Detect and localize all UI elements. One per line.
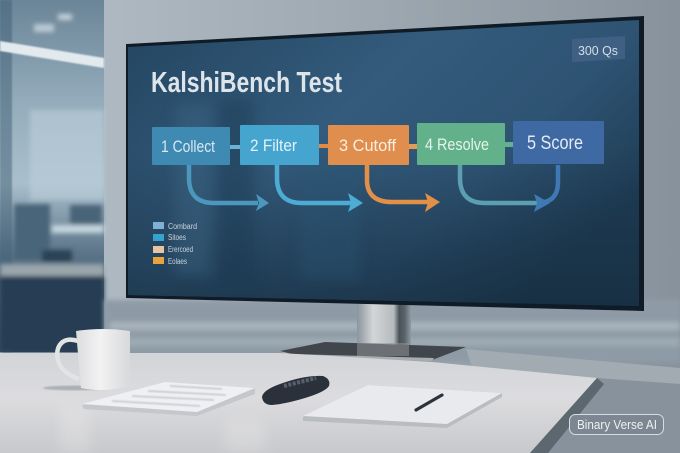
icon: pen (416, 395, 442, 410)
step 2 Filter: 2 Filter (250, 137, 297, 155)
arrow: resolve to score (460, 165, 558, 212)
watermark badge: Binary Verse AI (577, 417, 657, 432)
step 4 Resolve: 4 Resolve (425, 136, 489, 154)
legend (153, 222, 197, 266)
stand base (280, 342, 466, 360)
legend: Eolaes (168, 257, 187, 266)
legend: Erercoed (168, 245, 193, 254)
desk (0, 349, 680, 453)
step 1 Collect (152, 127, 230, 165)
monitor stand (280, 304, 466, 361)
badge: 300 Qs: 300 Qs (578, 44, 618, 58)
arrow: filter to cutoff (277, 165, 363, 212)
legend: Sitoes (168, 233, 186, 242)
step 4 Resolve (417, 123, 505, 165)
wall lower band (104, 300, 680, 362)
step 2 Filter (240, 125, 319, 165)
icon: coffee mug (43, 329, 130, 390)
watermark badge (570, 414, 664, 434)
connector lines (230, 142, 513, 149)
step 5 Score (513, 121, 604, 164)
legend: Combard (168, 222, 197, 231)
notepad with pen (303, 385, 502, 428)
monitor (126, 16, 644, 311)
screen (128, 20, 639, 306)
remote control (262, 376, 329, 405)
arrow: cutoff to resolve (367, 165, 440, 212)
stand column (357, 304, 411, 348)
document stack (82, 382, 255, 416)
step 1 Collect: 1 Collect (161, 138, 215, 156)
title: KalshiBench Test (151, 67, 342, 99)
step 5 Score: 5 Score (527, 133, 583, 154)
arrow: collect to filter (189, 165, 269, 211)
panel: blurred glass office (0, 0, 104, 352)
step 3 Cutoff: 3 Cutoff (339, 137, 396, 155)
badge: 300 Qs (572, 36, 625, 62)
step 3 Cutoff (328, 125, 409, 165)
